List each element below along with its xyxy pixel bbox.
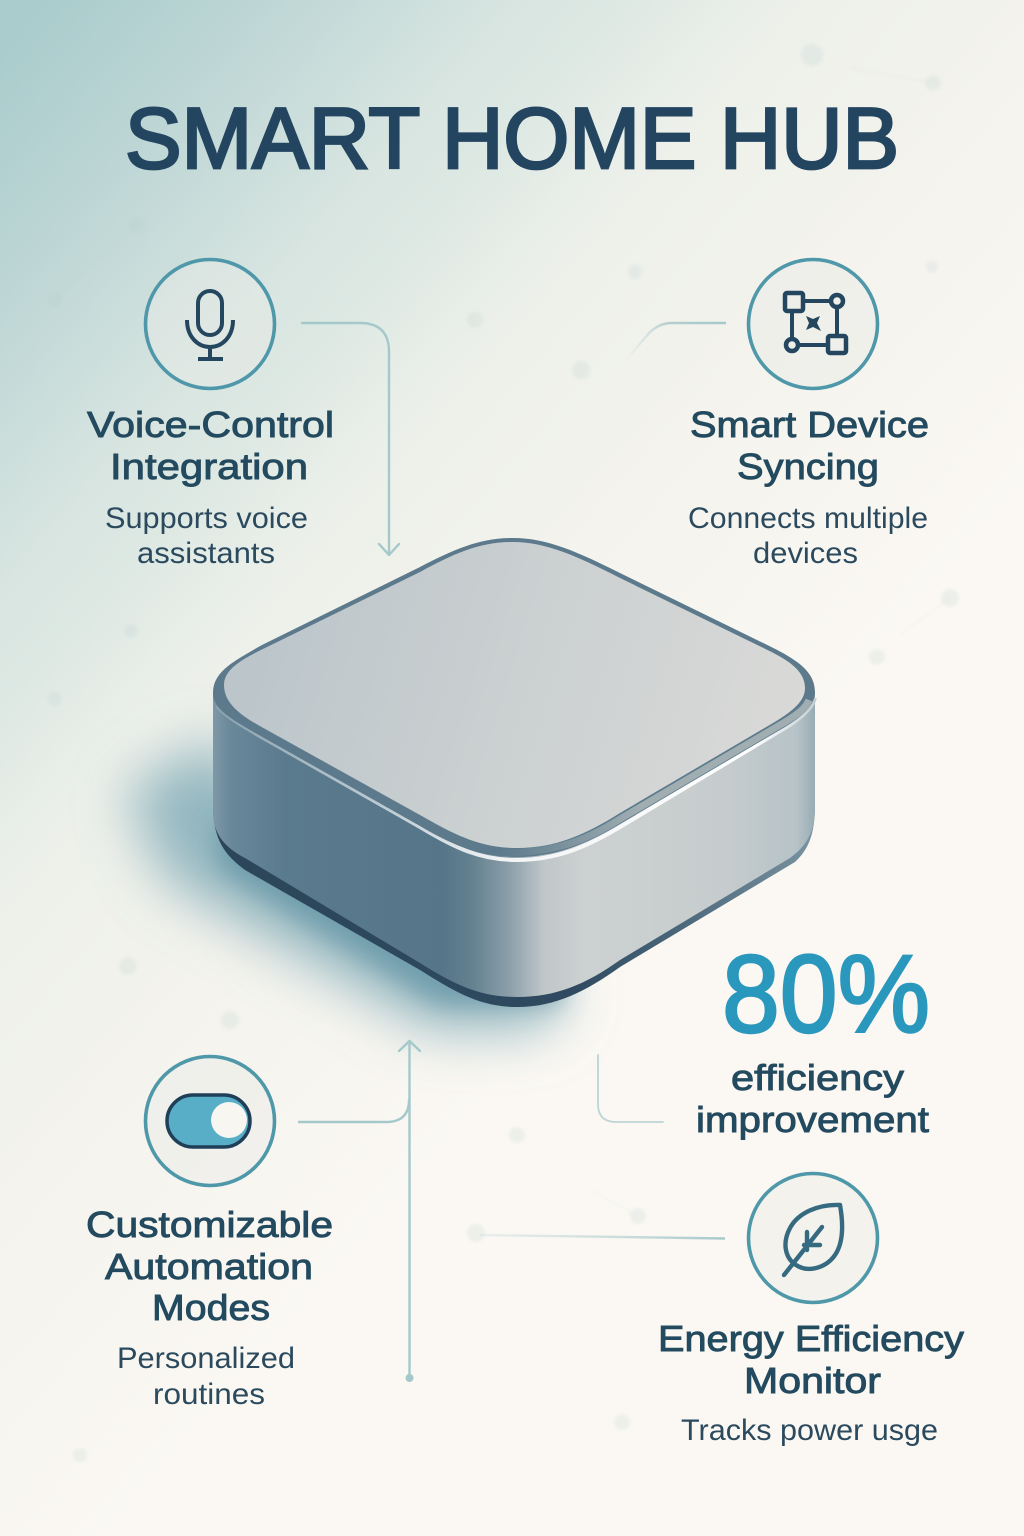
description <box>105 502 308 570</box>
heading: Integration <box>110 446 308 487</box>
lower right rim band <box>500 700 809 853</box>
panel: voice-control integration <box>87 260 334 570</box>
connector: voice control to hub <box>302 323 399 555</box>
heading: Energy Efficiency <box>658 1318 964 1359</box>
description <box>117 1342 295 1411</box>
description: Personalized <box>117 1342 295 1375</box>
title: SMART HOME HUB <box>125 91 899 187</box>
stat label: improvement <box>696 1099 929 1140</box>
icon: connected nodes <box>748 260 878 388</box>
device body <box>213 692 815 997</box>
panel: customizable automation modes <box>86 1056 333 1411</box>
device base <box>213 805 815 1007</box>
panel: smart device syncing <box>688 260 929 570</box>
icon: toggle switch <box>146 1056 274 1186</box>
heading: Customizable <box>86 1204 333 1245</box>
description <box>688 502 928 570</box>
connector: automation modes to hub <box>299 1041 420 1382</box>
description: devices <box>753 537 858 570</box>
white rim highlight <box>217 698 815 860</box>
heading <box>87 404 334 487</box>
heading: Monitor <box>744 1360 881 1401</box>
description: Tracks power usge <box>681 1414 938 1447</box>
heading <box>658 1318 964 1401</box>
device shadow <box>125 740 570 1030</box>
icon: leaf <box>748 1174 878 1302</box>
connector: energy monitor <box>480 1235 725 1238</box>
heading: Modes <box>152 1287 270 1328</box>
description: routines <box>153 1378 265 1411</box>
heading: Syncing <box>737 446 879 487</box>
top face <box>224 542 805 848</box>
connector: device syncing to hub <box>626 323 726 360</box>
heading: Automation <box>105 1246 313 1287</box>
stat label <box>696 1057 929 1140</box>
heading: Smart Device <box>690 404 929 445</box>
top rim <box>213 538 815 857</box>
connector: efficiency callout <box>598 1055 663 1122</box>
heading <box>86 1204 333 1328</box>
icon: microphone <box>146 260 274 388</box>
description: Connects multiple <box>688 502 928 535</box>
description: assistants <box>137 537 275 570</box>
device: smart home hub <box>125 538 815 1030</box>
heading <box>690 404 929 487</box>
panel: energy efficiency monitor <box>658 1174 964 1447</box>
callout: efficiency statistic <box>696 933 930 1140</box>
heading: Voice-Control <box>87 404 334 445</box>
stat label: efficiency <box>731 1057 904 1098</box>
big number: 80% <box>722 933 930 1056</box>
description: Supports voice <box>105 502 308 535</box>
